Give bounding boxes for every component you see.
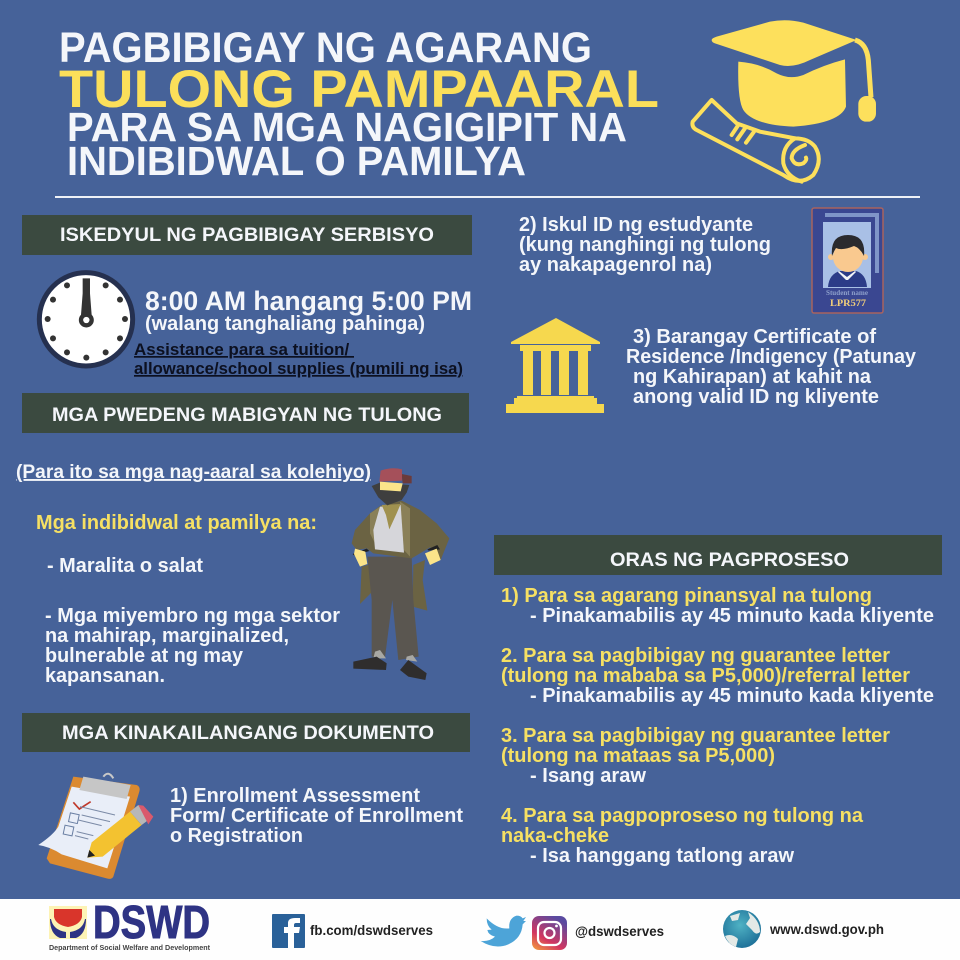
processing time list: (tulong na mababa sa P5,000)/referral letter <box>501 665 910 687</box>
processing time list: 4. Para sa pagpoproseso ng tulong na <box>501 805 864 827</box>
website: www.dswd.gov.ph <box>769 921 884 937</box>
icon: globe <box>723 910 761 948</box>
document 1 text: Form/ Certificate of Enrollment <box>170 805 463 827</box>
document 2 text: 2) Iskul ID ng estudyante <box>519 214 753 236</box>
panel: eligible header <box>22 393 469 433</box>
icon: poor man figure <box>352 468 449 680</box>
title <box>59 24 659 184</box>
logo: DSWD <box>49 896 210 952</box>
icon: graduation cap and diploma <box>692 20 876 182</box>
document 1 text: 1) Enrollment Assessment <box>170 785 420 807</box>
eligible list <box>36 512 340 687</box>
processing time list: 2. Para sa pagbibigay ng guarantee letter <box>501 645 890 667</box>
divider line <box>55 196 920 198</box>
processing time list <box>501 585 934 867</box>
document 3 text: ng Kahirapan) at kahit na <box>633 366 872 388</box>
icon: clipboard with pencil <box>38 774 153 879</box>
title: INDIBIDWAL O PAMILYA <box>67 138 526 184</box>
eligible list: Mga indibidwal at pamilya na: <box>36 512 317 534</box>
eligible list: kapansanan. <box>45 665 165 687</box>
panel: eligible header: MGA PWEDENG MABIGYAN NG TULONG <box>52 404 442 426</box>
eligible list: - Maralita o salat <box>47 555 203 577</box>
title: TULONG PAMPAARAL <box>59 60 659 119</box>
processing time list: naka-cheke <box>501 825 609 847</box>
document 3 text <box>626 326 917 408</box>
icon: facebook <box>272 914 305 948</box>
icon: clock <box>39 273 133 366</box>
instagram handle: @dswdserves <box>575 923 664 939</box>
icon: student ID card: Student name <box>826 289 868 297</box>
assistance note: allowance/school supplies (pumili ng isa) <box>134 359 463 378</box>
eligible list: na mahirap, marginalized, <box>45 625 289 647</box>
document 2 text <box>519 214 771 276</box>
icon: instagram <box>532 916 567 950</box>
panel: schedule header: ISKEDYUL NG PAGBIBIGAY SERBISYO <box>60 224 434 246</box>
schedule hours text: 8:00 AM hangang 5:00 PM <box>145 286 472 316</box>
panel: processing time header <box>494 535 942 575</box>
title: PARA SA MGA NAGIGIPIT NA <box>67 104 627 150</box>
document 3 text: Residence /Indigency (Patunay <box>626 346 917 368</box>
icon: student ID card <box>812 208 883 313</box>
assistance note: Assistance para sa tuition/ <box>134 340 354 359</box>
schedule hours text <box>145 286 472 335</box>
footer bar <box>0 899 960 960</box>
processing time list: - Isang araw <box>530 765 646 787</box>
document 1 text: o Registration <box>170 825 303 847</box>
title: PAGBIBIGAY NG AGARANG <box>59 24 592 72</box>
processing time list: (tulong na mataas sa P5,000) <box>501 745 775 767</box>
panel: documents header <box>22 713 470 752</box>
icon: student ID card: LPR577 <box>830 299 866 309</box>
assistance note <box>134 340 463 378</box>
logo: DSWD: Department of Social Welfare and Development <box>49 943 210 952</box>
icon: government building <box>506 318 604 413</box>
document 3 text: 3) Barangay Certificate of <box>633 326 876 348</box>
logo: DSWD: DSWD <box>93 896 210 948</box>
facebook handle: fb.com/dswdserves <box>310 922 433 938</box>
panel: schedule header <box>22 215 472 255</box>
schedule hours text: (walang tanghaliang pahinga) <box>145 313 425 335</box>
document 2 text: ay nakapagenrol na) <box>519 254 712 276</box>
college note: (Para ito sa mga nag-aaral sa kolehiyo) <box>16 462 371 483</box>
panel: processing time header: ORAS NG PAGPROSESO <box>610 549 849 571</box>
processing time list: - Isa hanggang tatlong araw <box>530 845 794 867</box>
processing time list: 1) Para sa agarang pinansyal na tulong <box>501 585 872 607</box>
processing time list: - Pinakamabilis ay 45 minuto kada kliyente <box>530 605 934 627</box>
processing time list: 3. Para sa pagbibigay ng guarantee letter <box>501 725 890 747</box>
icon: twitter <box>481 916 526 947</box>
processing time list: - Pinakamabilis ay 45 minuto kada kliyente <box>530 685 934 707</box>
document 1 text <box>170 785 463 847</box>
eligible list: bulnerable at ng may <box>45 645 244 667</box>
panel: documents header: MGA KINAKAILANGANG DOKUMENTO <box>62 722 434 744</box>
document 3 text: anong valid ID ng kliyente <box>633 386 879 408</box>
eligible list: - Mga miyembro ng mga sektor <box>45 605 340 627</box>
document 2 text: (kung nanghingi ng tulong <box>519 234 771 256</box>
